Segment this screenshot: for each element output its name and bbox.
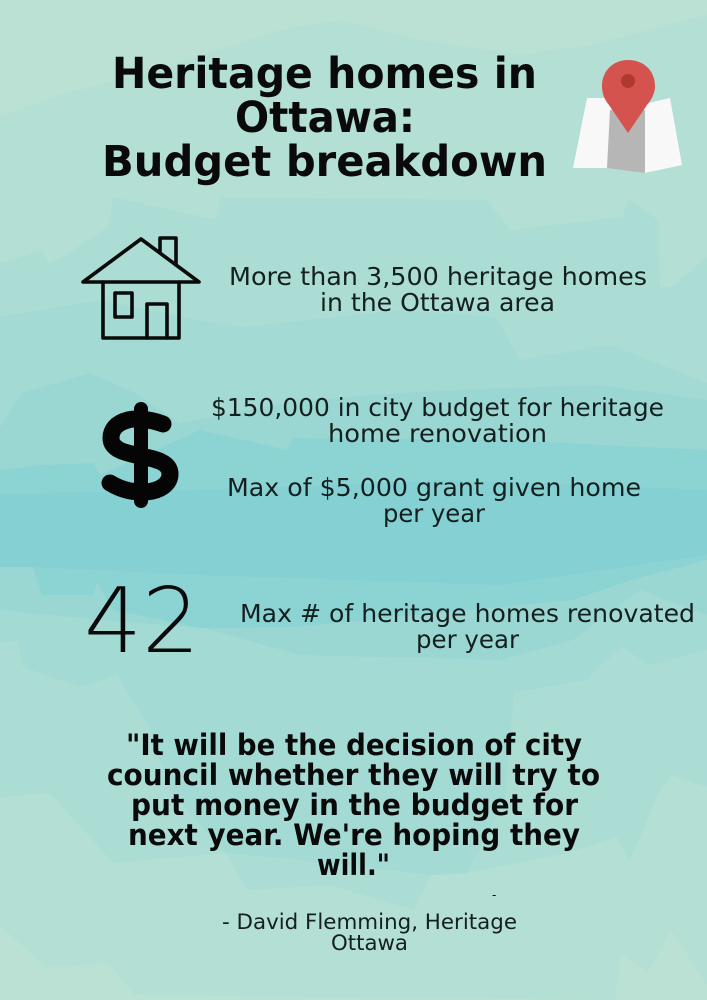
quote: "It will be the decision of city (126, 728, 582, 762)
text: city budget and grant: home renovation (328, 419, 547, 448)
text: city budget and grant (211, 393, 664, 528)
attribution: Ottawa (331, 931, 408, 955)
text: heritage homes count: More than 3,500 heritage homes (229, 262, 647, 291)
text: city budget and grant: Max of $5,000 grant given home (227, 473, 641, 502)
title: Ottawa: (235, 93, 415, 143)
stray dash: - (492, 888, 496, 902)
quote (107, 728, 600, 882)
title: Budget breakdown (102, 137, 547, 187)
text: heritage homes count (229, 262, 647, 317)
text: max homes renovated: per year (416, 625, 520, 654)
title (102, 49, 547, 187)
quote: council whether they will try to (107, 758, 600, 792)
attribution (222, 910, 517, 955)
quote: will." (317, 848, 390, 882)
text: city budget and grant: $150,000 in city budget for heritage (211, 393, 664, 422)
icon: house (83, 238, 199, 338)
text: heritage homes count: in the Ottawa area (320, 288, 555, 317)
stat: 42: 42 (84, 569, 200, 674)
title: Heritage homes in (112, 49, 537, 99)
text: city budget and grant: per year (383, 499, 486, 528)
attribution: - David Flemming, Heritage (222, 910, 517, 934)
text: max homes renovated (240, 599, 695, 654)
icon: map with location pin (573, 60, 682, 173)
quote: put money in the budget for (131, 788, 579, 822)
icon: dollar sign (110, 409, 170, 501)
text: max homes renovated: Max # of heritage homes renovated (240, 599, 695, 628)
quote: next year. We're hoping they (128, 818, 580, 852)
